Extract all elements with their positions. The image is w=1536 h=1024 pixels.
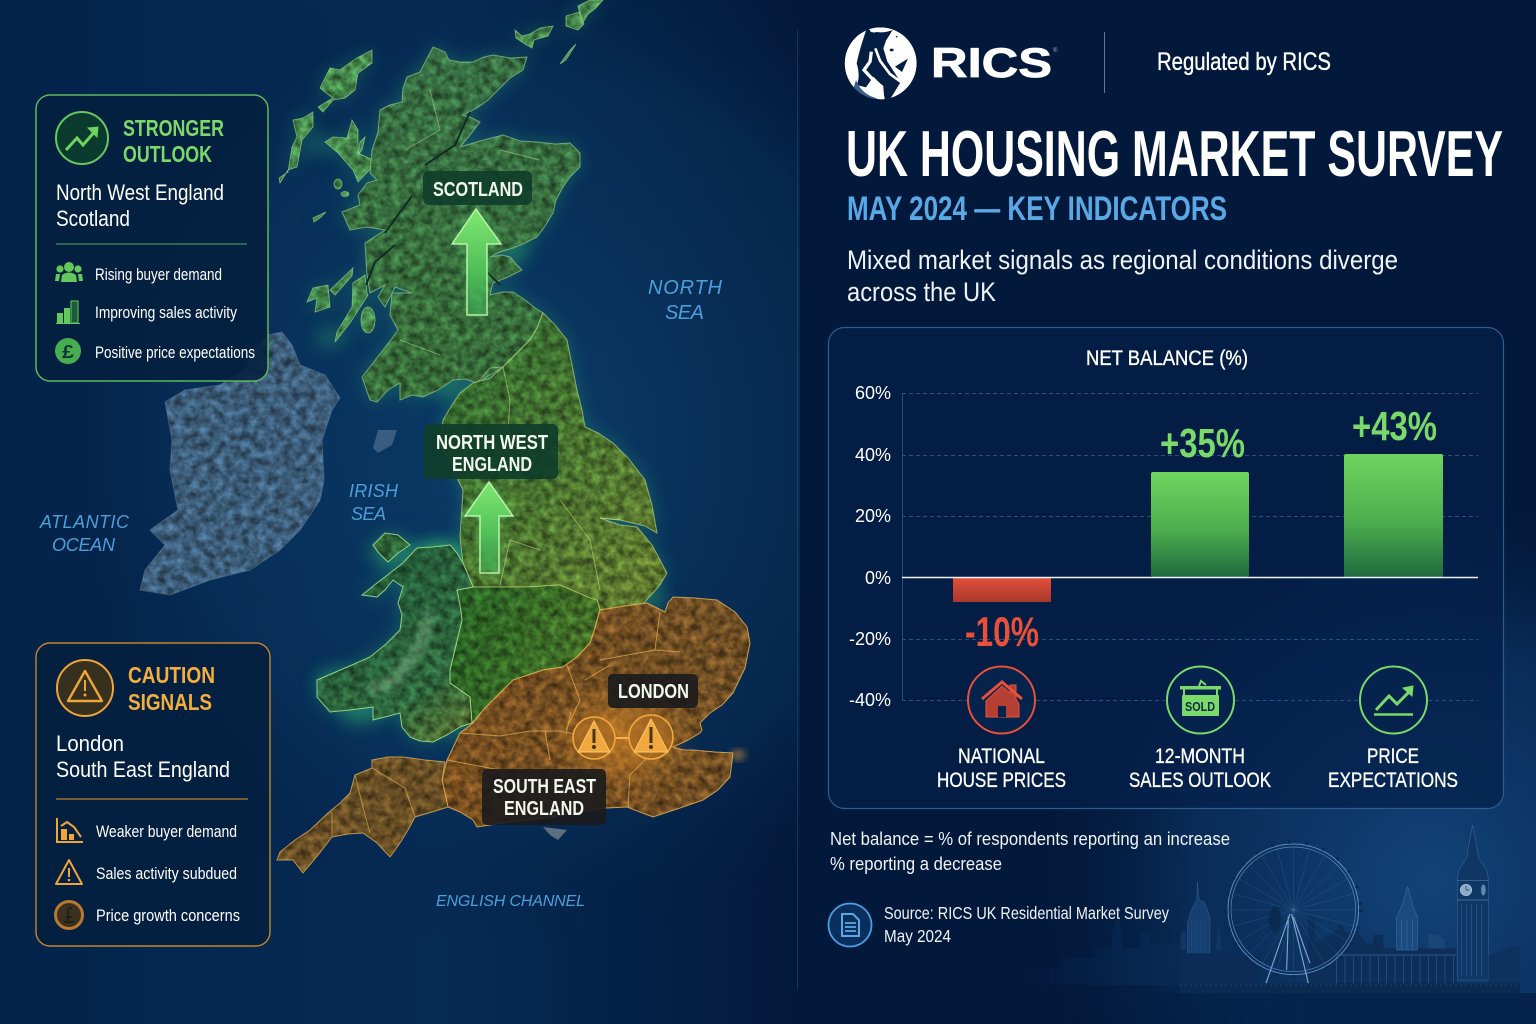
heading: caution signals: SIGNALS: [128, 689, 212, 715]
chart title: NET BALANCE (%): [1086, 347, 1248, 370]
label: London: [608, 674, 698, 708]
label: national house prices: HOUSE PRICES: [937, 769, 1066, 792]
sea label: English Channel: ENGLISH CHANNEL: [436, 893, 585, 910]
label: price expectations: PRICE: [1367, 745, 1419, 768]
icon: sold sign: SOLD: [1185, 699, 1215, 714]
label: sales outlook: 12-MONTH: [1155, 745, 1245, 768]
skyline: low buildings left: [1020, 915, 1260, 985]
skyline: river Thames: [1000, 993, 1536, 1024]
label: Scotland: SCOTLAND: [433, 179, 523, 201]
label: sales outlook: SALES OUTLOOK: [1129, 769, 1271, 792]
text: summary: across the UK: [847, 277, 996, 307]
chart: axis labels: 20%: [855, 506, 891, 526]
label: London: LONDON: [618, 681, 689, 703]
map: London warm glow: [572, 704, 672, 772]
label: national house prices: NATIONAL: [958, 745, 1045, 768]
text: net balance definition: Net balance = % of respondents reporting an increase: [830, 828, 1230, 849]
skyline: right low buildings: [1489, 945, 1520, 983]
logo: RICS lion and wordmark: ®: [1053, 47, 1058, 54]
label: North West England: ENGLAND: [452, 454, 532, 476]
chart: axis labels: [849, 383, 891, 710]
icon: falling chart: [57, 818, 83, 842]
panel: stronger outlook: [36, 95, 268, 381]
text: stronger regions: North West England: [56, 180, 224, 205]
icon: house: [968, 666, 1035, 734]
sea label: North Sea: [648, 277, 723, 324]
sea label: Irish Sea: SEA: [351, 504, 386, 524]
map: Scottish islands: [279, 0, 603, 342]
heading: caution signals: CAUTION: [128, 662, 215, 688]
label: national house prices: [937, 745, 1066, 792]
text: summary: [847, 245, 1398, 307]
label: price expectations: EXPECTATIONS: [1328, 769, 1458, 792]
icon: warning circle: [57, 660, 113, 716]
map: Wales: [317, 533, 473, 742]
icon: price trend: [1360, 666, 1427, 734]
value: plus 35 percent: +35%: [1160, 420, 1245, 466]
text: summary: Mixed market signals as regional conditions diverge: [847, 245, 1398, 275]
sea label: Atlantic Ocean: [39, 512, 130, 555]
panel: caution signals: [36, 643, 270, 946]
text: improving sales activity: Improving sales activity: [95, 303, 237, 322]
icon: warning triangle: [56, 860, 82, 884]
label: North West England: [424, 424, 558, 479]
arrow: North West England upward: [465, 482, 513, 573]
chart: axis labels: 40%: [855, 445, 891, 465]
label: price expectations: [1328, 745, 1458, 792]
logo: RICS lion and wordmark: [845, 27, 1058, 101]
chart: axis labels: -40%: [849, 690, 891, 710]
icon: pound coin amber: [56, 902, 82, 928]
subtitle: MAY 2024 — KEY INDICATORS: [847, 190, 1227, 228]
icon: buyers: [55, 262, 83, 282]
label: South East England: SOUTH EAST: [493, 776, 596, 798]
text: caution regions: South East England: [56, 757, 230, 782]
text: regulated by RICS: Regulated by RICS: [1157, 48, 1331, 76]
heading: stronger outlook: STRONGER: [123, 115, 224, 141]
label: North West England: NORTH WEST: [436, 432, 548, 454]
skyline: left tower: [1181, 882, 1222, 955]
sea label: Atlantic Ocean: OCEAN: [52, 535, 116, 555]
icon: pound coin: £: [62, 342, 74, 362]
icon: sold sign: [1167, 666, 1234, 734]
text: caution regions: [56, 731, 230, 782]
text: net balance definition: % reporting a decrease: [830, 853, 1002, 874]
label: South East England: [482, 769, 606, 825]
panel: net balance chart: [828, 328, 1504, 808]
map: Ireland: [140, 332, 397, 595]
text: stronger regions: Scotland: [56, 206, 130, 231]
value: minus 10 percent: -10%: [965, 608, 1039, 655]
text: caution regions: London: [56, 731, 124, 756]
text: positive price expectations: Positive price expectations: [95, 343, 255, 362]
label: South East England: ENGLAND: [504, 798, 584, 820]
sea label: North Sea: SEA: [665, 302, 704, 324]
sea label: North Sea: NORTH: [648, 277, 723, 299]
map: Northern England region: [440, 313, 667, 610]
text: sales activity subdued: Sales activity subdued: [96, 864, 237, 883]
sea label: Atlantic Ocean: ATLANTIC: [39, 512, 130, 532]
map: Midlands region: [450, 585, 600, 723]
bar: price expectations: [1344, 454, 1443, 577]
icon: pound coin: [55, 338, 81, 364]
skyline: London Eye wheel: [1226, 842, 1361, 983]
label: Scotland: [423, 171, 532, 205]
skyline: Elizabeth Tower: [1457, 825, 1489, 980]
map: Scotland region: [342, 47, 580, 402]
heading: stronger outlook: [123, 115, 224, 167]
text: source: Source: RICS UK Residential Market Survey: [884, 903, 1169, 923]
icon: London warning markers: [573, 715, 673, 759]
heading: stronger outlook: OUTLOOK: [123, 141, 212, 167]
text: net balance definition: [830, 828, 1230, 874]
text: source: [884, 903, 1169, 946]
chart: axis labels: 60%: [855, 383, 891, 403]
map: coastal glow: [279, 0, 745, 760]
arrow: Scotland upward: [452, 209, 501, 315]
value: plus 43 percent: +43%: [1352, 403, 1437, 449]
London skyline: [1000, 825, 1536, 1024]
heading: caution signals: [128, 662, 215, 715]
icon: rising trend circle: [56, 112, 108, 164]
skyline: embankment: [1180, 983, 1520, 993]
sea label: Irish Sea: IRISH: [349, 481, 399, 501]
map of the UK and Ireland: [140, 0, 750, 873]
chart: axis labels: 0%: [865, 568, 891, 588]
map: South East England region: [442, 597, 750, 840]
bar: national house prices: [953, 578, 1051, 602]
label: sales outlook: [1129, 745, 1271, 792]
sea label: Irish Sea: [349, 481, 399, 524]
icon: lion crest: [845, 27, 917, 101]
skyline: low riverside blocks: [1180, 953, 1243, 983]
text: price growth concerns: Price growth concerns: [96, 906, 240, 925]
bar: sales outlook: [1151, 472, 1249, 577]
text: weaker buyer demand: Weaker buyer demand: [96, 822, 237, 841]
text: source: May 2024: [884, 926, 951, 946]
wordmark: RICS: [931, 39, 1052, 86]
icon: source document: [828, 904, 872, 946]
icon: sales bars: [56, 301, 80, 324]
map: South West England region: [277, 757, 448, 873]
text: rising buyer demand: Rising buyer demand: [95, 265, 222, 284]
skyline: Palace of Westminster: [1308, 887, 1457, 983]
chart: axis labels: -20%: [849, 629, 891, 649]
text: stronger regions: [56, 180, 224, 231]
